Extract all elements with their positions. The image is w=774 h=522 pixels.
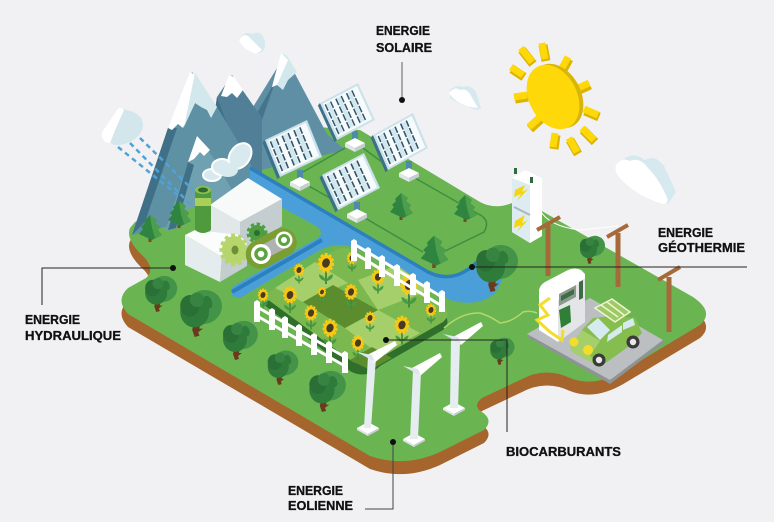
wires between solar panels	[303, 148, 487, 252]
lower block	[185, 230, 247, 282]
leader line: solaire	[399, 62, 405, 103]
gear: light	[222, 236, 246, 264]
label: energie eolienne: ENERGIE	[288, 484, 343, 498]
label: energie hydraulique: ENERGIE	[25, 313, 80, 327]
upper block	[210, 178, 282, 252]
turbine 1	[357, 341, 397, 436]
label: energie hydraulique: HYDRAULIQUE	[25, 329, 121, 343]
panel B	[317, 83, 375, 152]
rain cloud	[102, 108, 193, 207]
charging station	[537, 268, 585, 342]
factory	[185, 139, 302, 282]
cloud: centre	[449, 86, 481, 110]
transformer tower	[512, 168, 542, 243]
sun	[511, 43, 599, 154]
wind turbines	[357, 322, 483, 447]
label: energie solaire: ENERGIE	[376, 24, 430, 38]
cloud: top	[239, 33, 265, 54]
belt	[241, 223, 302, 274]
label: energie solaire: SOLAIRE	[376, 41, 432, 55]
leader line: hydraulique	[42, 265, 176, 305]
leader line: eolienne	[365, 439, 396, 509]
mountains	[132, 53, 345, 235]
solar panels	[262, 83, 428, 223]
round trees	[145, 232, 608, 412]
gear: dark	[249, 225, 265, 241]
sunflowers	[258, 253, 436, 360]
panel C	[370, 113, 428, 182]
charging cable	[444, 311, 537, 328]
island base	[122, 127, 706, 474]
mountain 2	[205, 75, 262, 180]
fence: front	[254, 300, 348, 373]
car pad	[527, 298, 663, 384]
leader line: geothermie	[469, 264, 747, 270]
factory platform	[185, 190, 321, 287]
turbine 2	[403, 353, 442, 447]
smoke cloud	[203, 139, 256, 181]
label: energie eolienne: EOLIENNE	[288, 499, 353, 513]
cloud: right	[616, 155, 676, 204]
field	[263, 248, 448, 375]
leader line: biocarburants	[383, 337, 507, 432]
label: energie geothermie: ENERGIE	[658, 226, 713, 240]
label: energie geothermie: GÉOTHERMIE	[658, 240, 745, 255]
chimney	[195, 186, 211, 233]
fence: back	[351, 239, 445, 312]
utility poles	[537, 217, 680, 332]
mountain 1	[132, 72, 262, 235]
icon: pine trees left	[139, 201, 191, 242]
car	[570, 299, 642, 367]
mountain snow	[168, 53, 297, 162]
turbine 3	[443, 322, 483, 416]
icon: pine trees right	[390, 193, 477, 268]
power lines	[540, 210, 618, 230]
mountain 3	[232, 55, 345, 172]
front peak	[165, 137, 232, 232]
panel D	[319, 153, 380, 223]
river	[231, 168, 505, 303]
label: biocarburants: BIOCARBURANTS	[506, 445, 621, 459]
panel A	[262, 120, 322, 191]
